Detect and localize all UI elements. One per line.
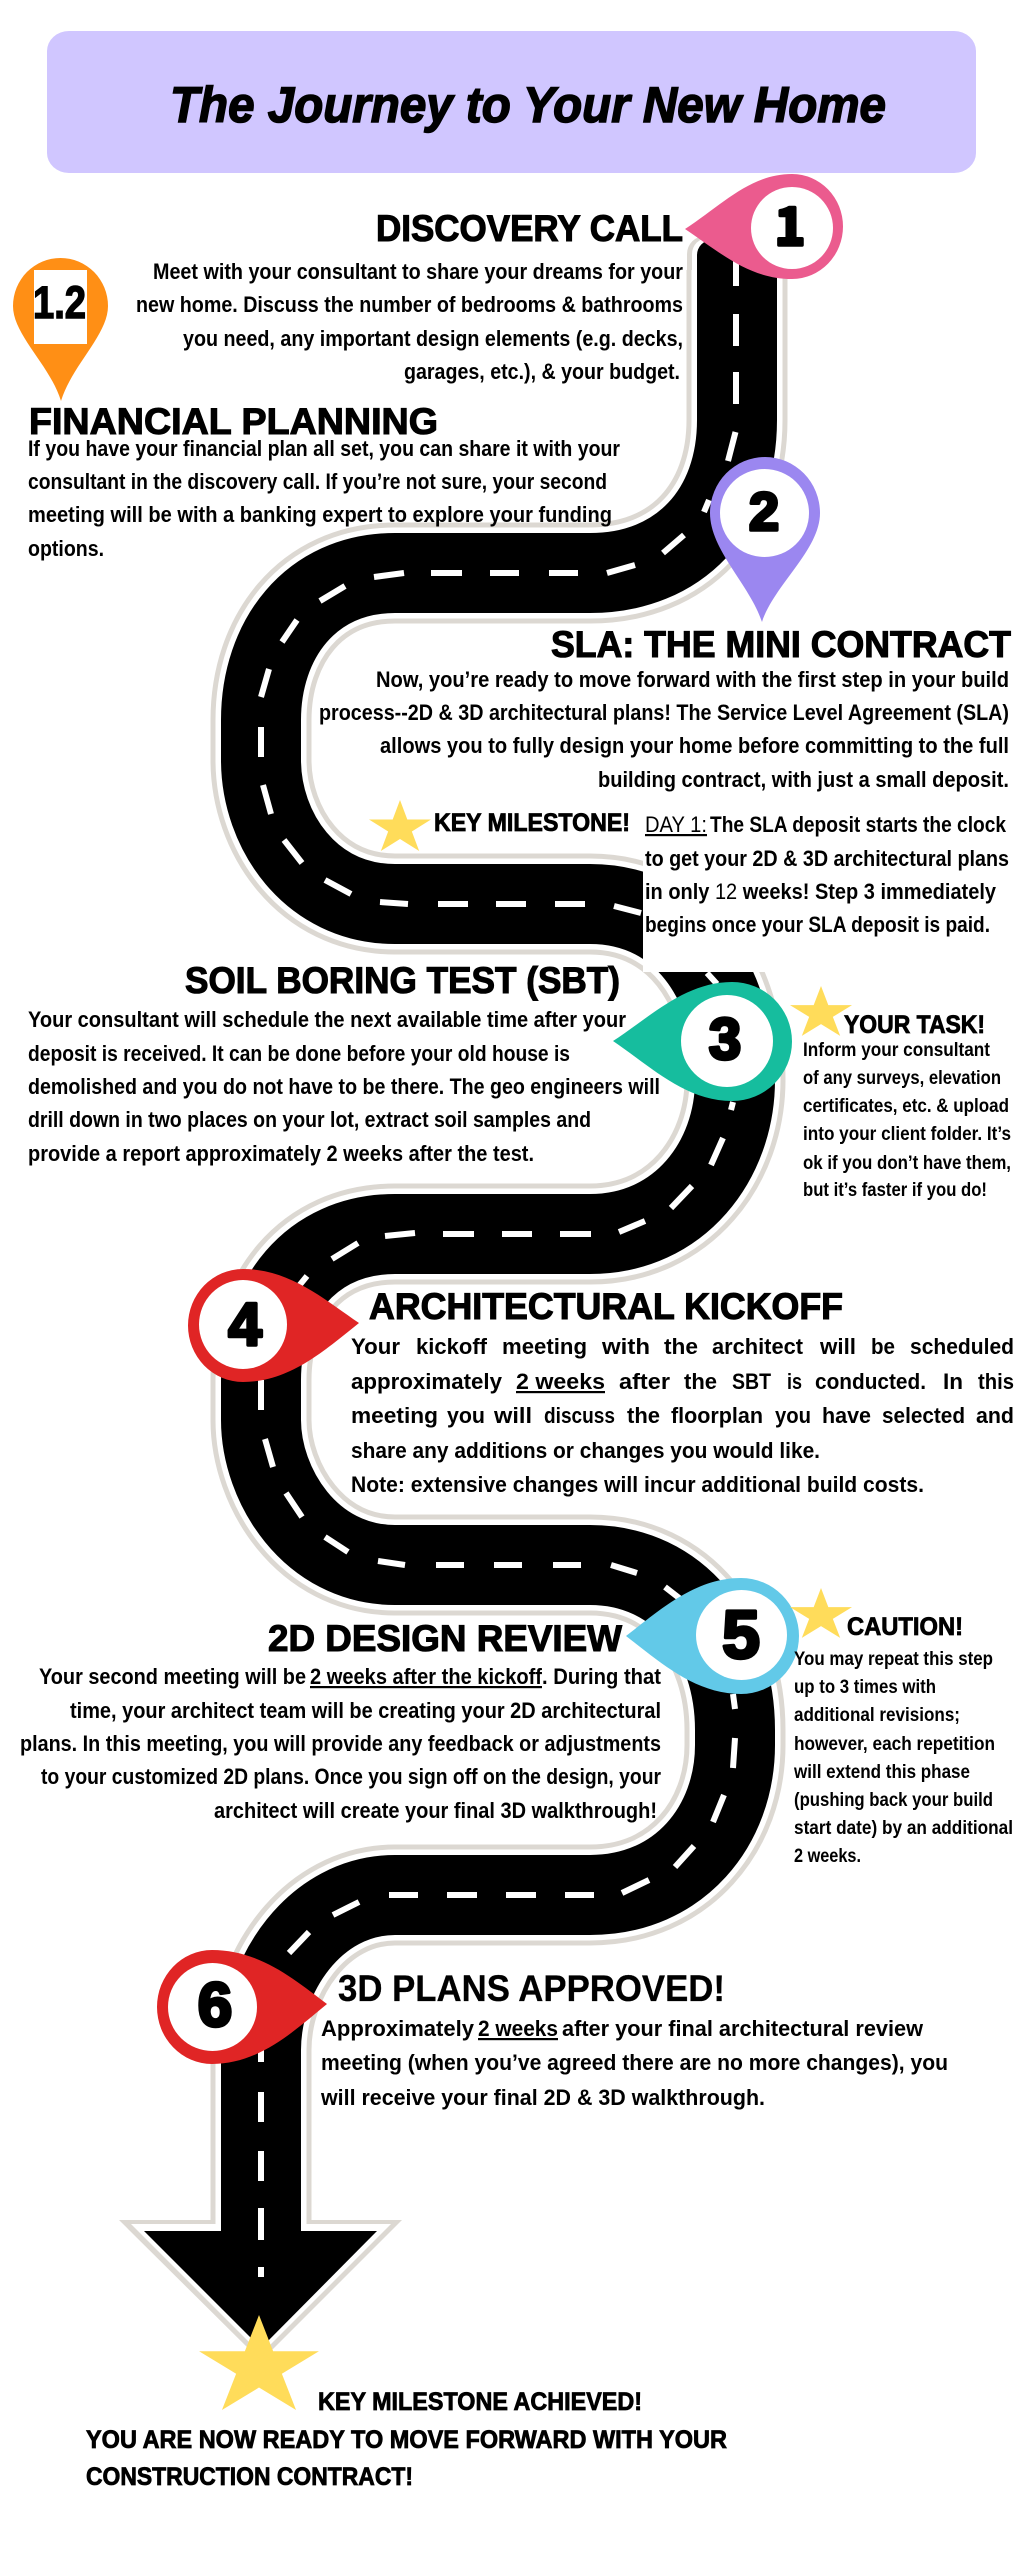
day 1 text: in only 12 weeks! Step 3 immediately: [645, 879, 997, 904]
pin 4: 4: [228, 1291, 262, 1358]
day 1 text: [645, 812, 1009, 937]
3d plans approved text: Approximately: [321, 2016, 475, 2041]
financial planning text: meeting will be with a banking expert to explore your funding: [28, 502, 612, 527]
pin 1.2: [13, 258, 108, 401]
2d design review text: [20, 1664, 662, 1823]
architectural kickoff text: this: [978, 1369, 1014, 1394]
architectural kickoff text: floorplan: [671, 1403, 763, 1428]
sla text: [319, 667, 1009, 792]
architectural kickoff heading: ARCHITECTURAL KICKOFF: [369, 1286, 843, 1327]
architectural kickoff text: SBT: [732, 1369, 771, 1394]
pin 3: 3: [709, 1007, 741, 1072]
2d design review text: 2 weeks after the kickoff: [310, 1664, 543, 1689]
architectural kickoff text: and: [976, 1403, 1014, 1428]
soil boring test text: provide a report approximately 2 weeks after the test.: [28, 1141, 534, 1166]
architectural kickoff text: share any additions or changes you would like.: [351, 1438, 820, 1463]
your task label: YOUR TASK!: [844, 1011, 985, 1039]
title banner: [47, 31, 976, 173]
key milestone achieved message: YOU ARE NOW READY TO MOVE FORWARD WITH YOUR: [86, 2426, 727, 2454]
2d design review text: . During that: [542, 1664, 662, 1689]
discovery call text: [136, 259, 683, 384]
caution text: 2 weeks.: [794, 1846, 861, 1867]
soil boring test text: deposit is received. It can be done before your old house is: [28, 1041, 570, 1066]
pin 2: 2: [749, 482, 779, 542]
financial planning text: [28, 436, 620, 561]
soil boring test text: demolished and you do not have to be there. The geo engineers will: [28, 1074, 660, 1099]
architectural kickoff text: the: [664, 1334, 698, 1359]
your task star: [790, 986, 852, 1036]
caution text: up to 3 times with: [794, 1677, 936, 1698]
soil boring test heading: SOIL BORING TEST (SBT): [185, 960, 620, 1001]
day 1 text: DAY 1:: [645, 812, 707, 837]
pin 5: [626, 1578, 799, 1694]
pin 6: 6: [198, 1971, 232, 2040]
title banner: The Journey to Your New Home: [170, 77, 886, 133]
architectural kickoff text: 2 weeks: [516, 1369, 605, 1394]
financial planning text: If you have your financial plan all set, you can share it with your: [28, 436, 620, 461]
winding road with arrow: [119, 236, 787, 2361]
pin 4: [188, 1269, 359, 1382]
caution text: (pushing back your build: [794, 1790, 993, 1811]
caution label: CAUTION!: [847, 1613, 963, 1641]
architectural kickoff text: have: [822, 1403, 871, 1428]
pin 1.2: 1.2: [33, 277, 86, 328]
architectural kickoff text: architect: [712, 1334, 804, 1359]
architectural kickoff text: after: [619, 1369, 670, 1394]
architectural kickoff text: scheduled: [910, 1334, 1014, 1359]
discovery call heading: DISCOVERY CALL: [376, 208, 683, 249]
caution text: additional revisions;: [794, 1705, 960, 1726]
soil boring test text: Your consultant will schedule the next available time after your: [28, 1007, 626, 1032]
architectural kickoff text: conducted.: [815, 1369, 926, 1394]
pin 5: 5: [722, 1597, 760, 1673]
key milestone achieved message: CONSTRUCTION CONTRACT!: [86, 2463, 413, 2491]
final milestone star: [199, 2315, 319, 2410]
3d plans approved heading: 3D PLANS APPROVED!: [338, 1968, 725, 2009]
pin 1: [685, 174, 843, 279]
road cut-out behind day 1 text: [643, 850, 1024, 972]
2d design review heading: 2D DESIGN REVIEW: [268, 1618, 622, 1659]
3d plans approved text: meeting (when you’ve agreed there are no more changes), you: [321, 2050, 948, 2075]
architectural kickoff text: you: [775, 1403, 811, 1428]
pin 6: [157, 1950, 327, 2064]
pin 1: 1: [775, 185, 805, 260]
2d design review text: to your customized 2D plans. Once you sign off on the design, your: [41, 1764, 661, 1789]
architectural kickoff text: approximately: [351, 1369, 503, 1394]
architectural kickoff text: kickoff: [416, 1334, 488, 1359]
architectural kickoff text: Your: [351, 1334, 400, 1359]
3d plans approved text: will receive your final 2D & 3D walkthrough.: [320, 2085, 765, 2110]
architectural kickoff text: [351, 1334, 1014, 1497]
your task text: Inform your consultant: [803, 1040, 991, 1061]
discovery call text: garages, etc.), & your budget.: [404, 359, 680, 384]
discovery call text: new home. Discuss the number of bedrooms & bathrooms: [136, 292, 683, 317]
2d design review text: plans. In this meeting, you will provide any feedback or adjustments: [20, 1731, 661, 1756]
architectural kickoff text: the: [684, 1369, 717, 1394]
architectural kickoff text: In: [943, 1369, 963, 1394]
pin 3: [613, 982, 792, 1101]
architectural kickoff text: selected: [882, 1403, 965, 1428]
architectural kickoff text: discuss: [544, 1403, 615, 1428]
key milestone achieved message: KEY MILESTONE ACHIEVED!: [318, 2388, 642, 2416]
architectural kickoff text: will: [493, 1403, 532, 1428]
caution text: [793, 1649, 1013, 1867]
soil boring test text: [28, 1007, 660, 1166]
sla heading: SLA: THE MINI CONTRACT: [551, 624, 1011, 665]
architectural kickoff text: the: [627, 1403, 660, 1428]
caution text: will extend this phase: [793, 1762, 970, 1783]
3d plans approved text: [320, 2016, 948, 2110]
discovery call text: you need, any important design elements (e.g. decks,: [183, 326, 683, 351]
financial planning heading: FINANCIAL PLANNING: [29, 401, 438, 442]
key milestone achieved message: [86, 2388, 727, 2491]
architectural kickoff text: Note: extensive changes will incur additional build costs.: [351, 1472, 924, 1497]
caution star: [790, 1588, 852, 1638]
soil boring test text: drill down in two places on your lot, extract soil samples and: [28, 1107, 591, 1132]
key milestone label: KEY MILESTONE!: [434, 809, 630, 837]
your task text: of any surveys, elevation: [803, 1068, 1001, 1089]
key milestone star: [369, 800, 431, 851]
financial planning text: consultant in the discovery call. If you’re not sure, your second: [28, 469, 607, 494]
your task text: [803, 1040, 1011, 1201]
your task text: but it’s faster if you do!: [803, 1180, 987, 1201]
architectural kickoff text: you: [447, 1403, 485, 1428]
architectural kickoff text: be: [871, 1334, 895, 1359]
architectural kickoff text: with: [601, 1334, 650, 1359]
caution text: You may repeat this step: [794, 1649, 993, 1670]
pin 2: [710, 457, 820, 622]
2d design review text: architect will create your final 3D walkthrough!: [214, 1798, 657, 1823]
architectural kickoff text: meeting: [502, 1334, 587, 1359]
architectural kickoff text: is: [787, 1369, 802, 1394]
caution text: however, each repetition: [794, 1734, 995, 1755]
2d design review text: Your second meeting will be: [39, 1664, 306, 1689]
architectural kickoff text: meeting: [351, 1403, 438, 1428]
3d plans approved text: 2 weeks: [478, 2016, 558, 2041]
3d plans approved text: after your final architectural review: [562, 2016, 924, 2041]
financial planning text: options.: [28, 536, 104, 561]
2d design review text: time, your architect team will be creating your 2D architectural: [70, 1698, 661, 1723]
discovery call text: Meet with your consultant to share your dreams for your: [153, 259, 683, 284]
architectural kickoff text: will: [819, 1334, 856, 1359]
